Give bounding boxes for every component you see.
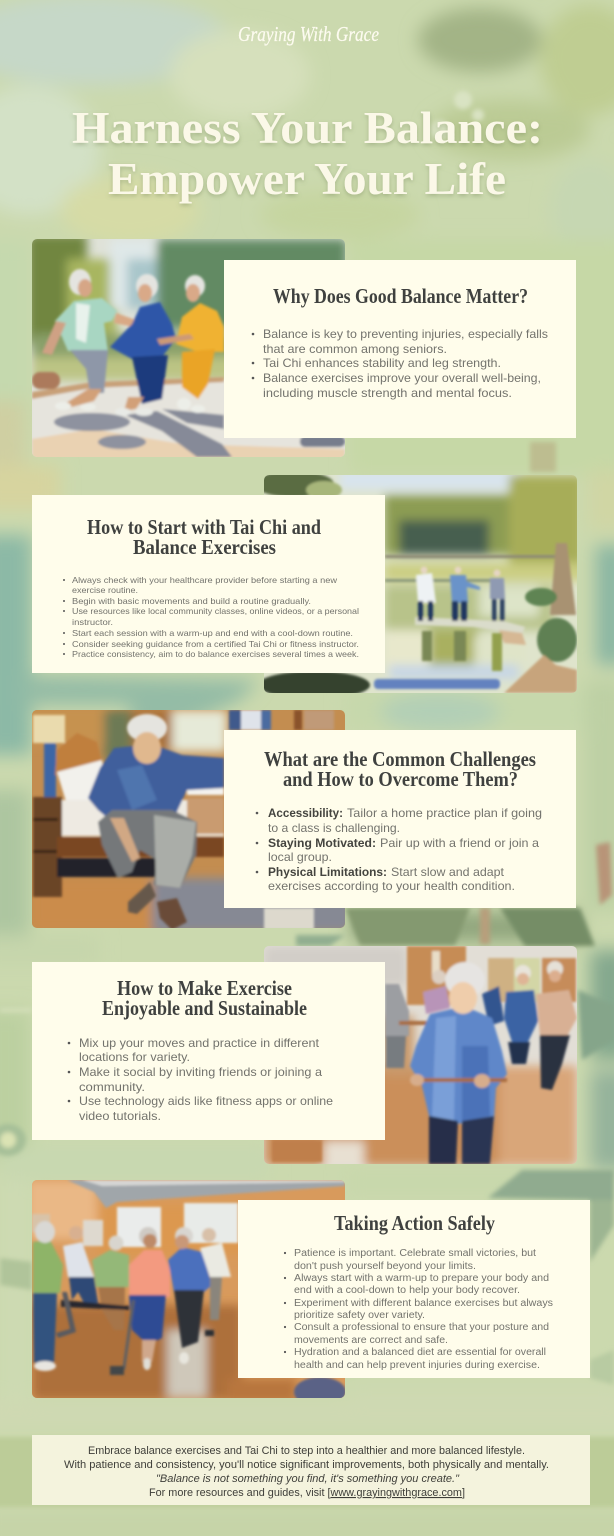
image: three seniors walking in park — [27, 234, 347, 461]
bullet list — [252, 327, 548, 400]
bullet list — [284, 1248, 553, 1371]
image: three seniors by a pond — [254, 470, 584, 699]
heading: What are the Common Challenges — [264, 747, 536, 771]
footer callout: Embrace balance exercises and Tai Chi to step into a healthier and more balanced lifestyle. — [88, 1445, 525, 1457]
title: Empower Your Life — [108, 154, 506, 204]
bullet list: including muscle strength and mental focus. — [263, 386, 512, 400]
bullet list: health and can help prevent injuries during exercise. — [294, 1360, 540, 1371]
bullet list: Balance is key to preventing injuries, especially falls — [263, 327, 548, 341]
bullet list: locations for variety. — [79, 1050, 190, 1064]
panel: enjoyable exercise — [32, 946, 577, 1166]
bullet list: Staying Motivated: — [268, 836, 376, 850]
heading — [102, 976, 307, 1020]
bullet list: Tailor a home practice plan if going — [347, 806, 542, 820]
bullet list: Use resources like local community classes, online videos, or a personal — [72, 606, 359, 616]
bullet list: to a class is challenging. — [268, 821, 400, 835]
bullet list: video tutorials. — [79, 1109, 161, 1123]
image: man sitting on bed — [27, 705, 352, 933]
bullet list: Begin with basic movements and build a routine gradually. — [72, 596, 311, 606]
heading: Taking Action Safely — [334, 1211, 495, 1235]
bullet list: prioritize safety over variety. — [294, 1310, 425, 1321]
image: group exercising with walkers — [27, 1180, 346, 1407]
heading — [264, 747, 536, 791]
bullet list: Start slow and adapt — [391, 865, 505, 879]
card: enjoyable exercise — [32, 962, 385, 1140]
card: why balance matters — [224, 260, 576, 438]
heading: How to Make Exercise — [117, 976, 292, 1000]
heading: Why Does Good Balance Matter? — [273, 284, 528, 308]
bullet list — [68, 1036, 333, 1123]
bullet list: Physical Limitations: — [268, 865, 387, 879]
footer callout — [32, 1435, 590, 1505]
bullet list: movements are correct and safe. — [294, 1335, 448, 1346]
bullet list: Balance exercises improve your overall well-being, — [263, 371, 541, 385]
bullet list: Mix up your moves and practice in different — [79, 1036, 320, 1050]
bullet list: don't push yourself beyond your limits. — [294, 1261, 476, 1272]
bullet list — [63, 575, 359, 659]
bullet list: Consult a professional to ensure that your posture and — [294, 1322, 549, 1333]
bullet list: exercises according to your health condition. — [268, 879, 515, 893]
bullet list: community. — [79, 1080, 145, 1094]
panel: why balance matters — [27, 234, 576, 461]
bullet list: Experiment with different balance exercises but always — [294, 1298, 553, 1309]
bullet list: Make it social by inviting friends or joining a — [79, 1065, 322, 1079]
bullet list: Use technology aids like fitness apps or online — [79, 1094, 333, 1108]
footer callout: "Balance is not something you find, it's something you create." — [156, 1473, 460, 1485]
logo: Graying With Grace — [238, 22, 379, 46]
bullet list: Tai Chi enhances stability and leg strength. — [263, 356, 501, 370]
bullet list: Hydration and a balanced diet are essential for overall — [294, 1347, 546, 1358]
card: how to start — [32, 495, 385, 673]
bullet list: Start each session with a warm-up and end with a cool-down routine. — [72, 628, 353, 638]
heading — [87, 515, 321, 559]
bullet list — [256, 806, 542, 893]
heading: Balance Exercises — [133, 535, 276, 559]
panel: how to start — [32, 470, 584, 699]
heading: and How to Overcome Them? — [283, 767, 518, 791]
panel: common challenges — [27, 705, 576, 933]
card: taking action safely — [238, 1200, 590, 1378]
title — [72, 103, 543, 204]
footer callout: For more resources and guides, visit [www.grayingwithgrace.com] — [149, 1487, 465, 1499]
footer callout: With patience and consistency, you'll notice significant improvements, both physically and mentally. — [64, 1459, 549, 1471]
bullet list: end with a cool-down to help your body recover. — [294, 1285, 520, 1296]
heading: How to Start with Tai Chi and — [87, 515, 321, 539]
bullet list: exercise routine. — [72, 585, 138, 595]
bullet list: instructor. — [72, 617, 113, 627]
card: common challenges — [224, 730, 576, 908]
bullet list: Pair up with a friend or join a — [380, 836, 539, 850]
bullet list: Consider seeking guidance from a certified Tai Chi or fitness instructor. — [72, 639, 359, 649]
image: smiling woman exercising with a group — [264, 946, 577, 1166]
bullet list: Always check with your healthcare provider before starting a new — [72, 575, 338, 585]
panel: taking action safely — [27, 1180, 590, 1407]
title: Harness Your Balance: — [72, 103, 543, 153]
bullet list: Patience is important. Celebrate small victories, but — [294, 1248, 536, 1259]
bullet list: local group. — [268, 850, 332, 864]
heading: Enjoyable and Sustainable — [102, 996, 307, 1020]
bullet list: Accessibility: — [268, 806, 343, 820]
bullet list: Practice consistency, aim to do balance exercises several times a week. — [72, 649, 359, 659]
bullet list: Always start with a warm-up to prepare your body and — [294, 1273, 549, 1284]
bullet list: that are common among seniors. — [263, 342, 447, 356]
